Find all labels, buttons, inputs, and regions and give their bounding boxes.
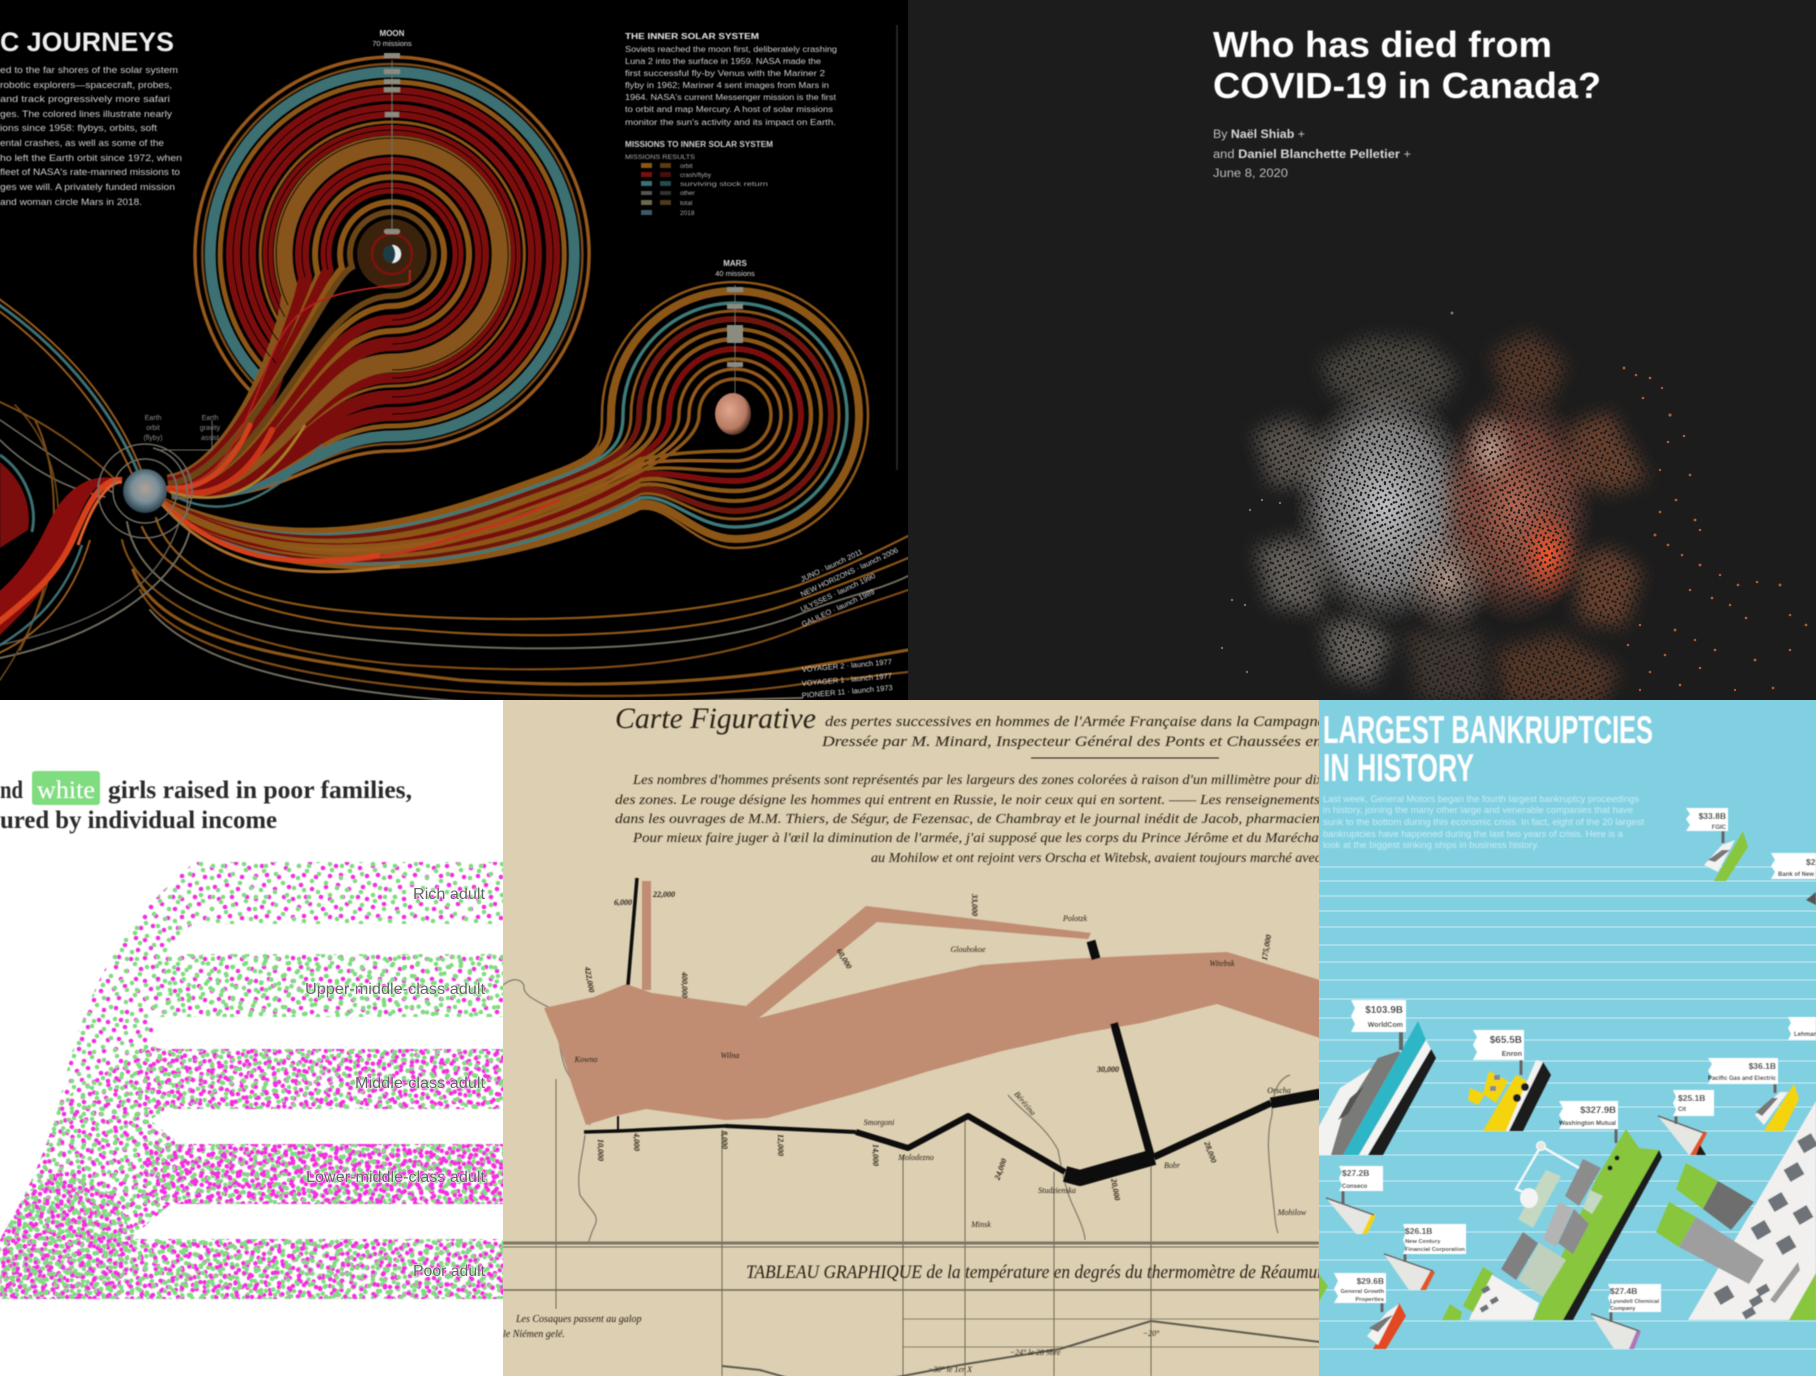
- boat: cit: $25.1B: [1678, 1093, 1705, 1103]
- text block: intro: and woman circle Mars in 2018.: [0, 197, 142, 208]
- city labels: Bérézina: [1012, 1090, 1038, 1117]
- text block: intro: in history, joining the many other large and venerable companies that have: [1323, 805, 1633, 815]
- legend: missions to inner solar system: MISSIONS RESULTS: [625, 154, 696, 161]
- city labels: Kowno: [574, 1055, 597, 1064]
- labels: outer planet missions: [799, 546, 900, 700]
- ship: fgic: [1686, 808, 1748, 881]
- band labels: Lower-middle-class adult: [306, 1169, 486, 1186]
- legend: missions to inner solar system: total: [680, 200, 693, 207]
- ship: fgic: $33.8B: [1699, 811, 1726, 821]
- temperature labels: [928, 1329, 1160, 1374]
- chart: advancing army flow: [544, 881, 1320, 1125]
- city labels: Wilna: [721, 1051, 739, 1060]
- label: mars: 40 missions: [715, 269, 755, 278]
- panel: minard map: [503, 700, 1325, 1376]
- city labels: 400,000: [680, 971, 689, 998]
- ship: enron: [1468, 1030, 1551, 1131]
- text block: explanation: des zones. Le rouge désigne les hommes qui entrent en Russie, le noir ceux qui en sortent. —— Les renseignements: [615, 792, 1320, 807]
- heading: white girls raised in poor families: girls raised in poor families,: [108, 775, 412, 804]
- ship: building ship: [1656, 1101, 1816, 1320]
- legend: missions to inner solar system: surviving stock return: [680, 181, 769, 188]
- text block: explanation: au Mohilow et ont rejoint vers Orscha et Witebsk, avaient toujours marché avec: [871, 850, 1321, 865]
- title: IN HISTORY: [1323, 747, 1474, 790]
- text block: intro: [0, 65, 182, 208]
- note: cossacks: le Niémen gelé.: [503, 1329, 565, 1340]
- label: mars: MARS: [723, 259, 747, 268]
- text block: explanation: Pour mieux faire juger à l'œil la diminution de l'armée, j'ai supposé que les corps du Prince Jérôme et du Maréchal: [632, 830, 1323, 845]
- text block: the inner solar system: 1964. NASA's current Messenger mission is the first: [625, 92, 837, 102]
- panel: cosmic journeys: [0, 24, 908, 700]
- boat: cit: Cit: [1678, 1107, 1686, 1113]
- spiral: outer planets arcs at left: [0, 296, 142, 655]
- city labels: Smorgoni: [864, 1118, 894, 1127]
- text block: intro: Last week, General Motors began the fourth largest bankruptcy proceedings: [1323, 794, 1640, 804]
- ship: pacific gas and electric: Pacific Gas and Electric: [1708, 1076, 1777, 1082]
- city labels: 60,000: [835, 947, 854, 971]
- subtitle: Dressée par M. Minard, Inspecteur Général des Ponts et Chaussées en: [821, 734, 1322, 750]
- city labels: Molodezno: [897, 1153, 934, 1162]
- trunk: upper flow: [60, 862, 195, 1100]
- boat: lyondell chemical: Company: [1610, 1306, 1636, 1312]
- text block: intro: fleet of NASA's rate-manned missions to: [0, 167, 180, 178]
- city labels: Witebsk: [1210, 959, 1235, 968]
- label: earth orbit: (flyby): [143, 435, 163, 442]
- chart: retreating army flow: [584, 878, 1320, 1178]
- text block: intro: robotic explorers—spacecraft, probes,: [0, 80, 172, 91]
- heading: cosmic journeys: C JOURNEYS: [0, 27, 174, 57]
- heading: white girls raised in poor families: ured by individual income: [0, 805, 277, 834]
- city labels: 175,000: [1260, 934, 1273, 961]
- ship: general growth properties: Properties: [1355, 1297, 1384, 1303]
- ship: general growth properties: $29.6B: [1357, 1276, 1384, 1286]
- labels: outer planet missions: VOYAGER 2 · launch 1977: [801, 657, 892, 674]
- city labels: Bobr: [1164, 1161, 1181, 1170]
- label: mars: [715, 259, 755, 278]
- city labels: 10,000: [596, 1139, 605, 1161]
- text block: intro: ental crashes, as well as some of the: [0, 138, 164, 149]
- city labels: Studzienska: [1038, 1186, 1076, 1195]
- ship: enron: Enron: [1502, 1051, 1522, 1058]
- labels: outer planet missions: PIONEER 11 · launch 1973: [801, 683, 893, 700]
- legend: missions to inner solar system: crash/flyby: [680, 172, 712, 179]
- chart: income flow dots: [0, 862, 504, 1299]
- band labels: Upper-middle-class adult: [305, 981, 486, 998]
- subtitle: [821, 714, 1325, 758]
- note: cossacks: [503, 1314, 642, 1340]
- city labels: Mohilow: [1277, 1208, 1307, 1217]
- labels: outer planet missions: JUNO · launch 2011: [799, 547, 864, 584]
- orbit rings around earth: [98, 420, 212, 538]
- label: earth orbit: gravity: [200, 425, 221, 432]
- text block: intro: bankruptcies have happened during the last two years of crisis. Here is a: [1323, 829, 1623, 839]
- rivers: [503, 980, 1290, 1243]
- legend: missions to inner solar system: MISSIONS TO INNER SOLAR SYSTEM: [625, 140, 773, 149]
- band: poor adult: [0, 1239, 504, 1299]
- heading: white girls raised in poor families: white: [37, 775, 95, 804]
- text block: the inner solar system: first successful fly-by Venus with the Mariner 2: [625, 68, 825, 78]
- boat: lyondell chemical: $27.4B: [1610, 1286, 1637, 1296]
- boat: lyondell chemical: Lyondell Chemical: [1610, 1299, 1660, 1305]
- grid lines: [503, 1079, 1319, 1376]
- labels: outer planet missions: ULYSSES · launch 1990: [799, 571, 877, 614]
- text block: intro: look at the biggest sinking ships in business history.: [1323, 840, 1539, 850]
- temperature labels: −24° le 28 9bre: [1010, 1348, 1061, 1357]
- band: lower-middle-class adult: [145, 1144, 504, 1204]
- panel: covid-19 canada: [908, 0, 1816, 700]
- label: moon: MOON: [380, 29, 405, 38]
- city labels: Polotzk: [1062, 914, 1087, 923]
- title: [1213, 24, 1601, 106]
- title: carte figurative: Carte Figurative: [615, 702, 816, 735]
- boat: new century: [1384, 1224, 1466, 1290]
- boat: cit: [1658, 1090, 1714, 1155]
- spiral: mars missions: [160, 282, 868, 572]
- temperature labels: −20°: [1143, 1329, 1160, 1338]
- note: cossacks: Les Cosaques passent au galop: [515, 1314, 642, 1325]
- label: moon: 70 missions: [372, 39, 412, 48]
- flag: lehman: [1788, 1017, 1816, 1040]
- band labels: [305, 886, 486, 1280]
- ship: worldcom: WorldCom: [1368, 1022, 1403, 1029]
- text block: intro: ions since 1958: flybys, orbits, soft: [0, 123, 157, 134]
- band: upper-middle-class adult: [155, 954, 504, 1017]
- panel: income mobility dots: [0, 700, 503, 1376]
- flag: bank of new england: $2: [1806, 857, 1816, 867]
- city labels: 8,000: [720, 1131, 729, 1149]
- ship: general growth properties: [1334, 1273, 1406, 1349]
- labels: outer planet missions: VOYAGER 1 · launch 1977: [801, 671, 892, 688]
- text block: intro: ges we will. A privately funded mission: [0, 182, 175, 193]
- icon: moon: [383, 229, 401, 263]
- chart: virus dot cloud: [1210, 312, 1807, 705]
- label: moon: [372, 29, 412, 48]
- ship: enron: $65.5B: [1490, 1035, 1522, 1046]
- flag: bank of new england: [1771, 853, 1816, 905]
- legend: missions to inner solar system: other: [680, 190, 696, 197]
- text block: intro: sunk to the bottom during this economic crisis. In fact, eight of the 20 largest: [1323, 817, 1645, 827]
- label: earth orbit: [143, 415, 221, 442]
- subtitle: des pertes successives en hommes de l'Armée Française dans la Campagne: [825, 714, 1325, 730]
- text block: the inner solar system: Luna 2 into the surface in 1959. NASA made the: [625, 56, 821, 66]
- boat: conseco: [1326, 1166, 1383, 1234]
- label: earth orbit: Earth: [202, 415, 218, 422]
- icon: earth: [123, 469, 167, 513]
- labels: outer planet missions: GALILEO · launch 1989: [800, 587, 876, 629]
- labels: outer planet missions: NEW HORIZONS · launch 2006: [799, 546, 900, 599]
- temperature labels: −30° le 1er X: [928, 1365, 973, 1374]
- band labels: Rich adult: [413, 886, 486, 903]
- text block: the inner solar system: to orbit and map Mercury. A host of solar missions: [625, 104, 833, 114]
- heading: white girls raised in poor families: nd: [0, 775, 23, 804]
- legend: missions to inner solar system: 2018: [680, 210, 695, 217]
- text block: intro: ho left the Earth orbit since 1972, when: [0, 153, 182, 164]
- text block: explanation: Les nombres d'hommes présents sont représentés par les largeurs des zones colorées à raison d'un millimètre pour dix: [632, 772, 1323, 787]
- band: middle-class adult: [145, 1049, 504, 1109]
- legend: missions to inner solar system: orbit: [680, 163, 693, 170]
- city labels: Orscha: [1267, 1086, 1291, 1095]
- byline: June 8, 2020: [1213, 168, 1288, 180]
- ship: washington mutual: [1442, 1101, 1662, 1320]
- boat: conseco: Conseco: [1342, 1184, 1368, 1190]
- title: COVID-19 in Canada?: [1213, 65, 1601, 106]
- text block: the inner solar system: Soviets reached the moon first, deliberately crashing: [625, 44, 837, 54]
- band: rich adult: [193, 862, 504, 924]
- text block: the inner solar system: THE INNER SOLAR SYSTEM: [625, 31, 759, 41]
- ship: worldcom: [1318, 1000, 1436, 1155]
- city labels: [574, 890, 1307, 1229]
- city labels: Gloubokoe: [950, 945, 986, 954]
- byline: and Daniel Blanchette Pelletier +: [1213, 149, 1411, 161]
- ship: fgic: FGIC: [1712, 825, 1727, 831]
- legend: missions to inner solar system: [625, 140, 773, 217]
- city labels: 6,000: [614, 898, 632, 907]
- title: [1323, 709, 1653, 790]
- chart: long mission lines to outer planets: [0, 402, 908, 705]
- text block: intro: and track progressively more safari: [0, 94, 170, 105]
- title: LARGEST BANKRUPTCIES: [1323, 709, 1653, 752]
- city labels: 12,000: [776, 1134, 785, 1156]
- ship: pacific gas and electric: $36.1B: [1749, 1061, 1776, 1071]
- city labels: Minsk: [970, 1220, 991, 1229]
- city labels: 22,000: [652, 890, 675, 899]
- text block: intro: [1323, 794, 1645, 850]
- trunk: dense lower flow: [0, 1170, 135, 1299]
- ship: worldcom: $103.9B: [1365, 1005, 1403, 1016]
- water lines: [1319, 867, 1816, 1349]
- ship: general growth properties: General Growth: [1340, 1289, 1384, 1295]
- text block: the inner solar system: flyby in 1962; Mariner 4 sent images from Mars in: [625, 80, 829, 90]
- text block: explanation: dans les ouvrages de M.M. Thiers, de Ségur, de Fezensac, de Chambray et le journal inédit de Jacob, pharmacien: [615, 811, 1320, 826]
- city labels: 33,000: [970, 893, 979, 916]
- trunk: middle flow: [0, 1045, 175, 1239]
- chart: temperature line: [722, 1321, 1320, 1376]
- text block: intro: ges. The colored lines illustrate nearly: [0, 109, 172, 120]
- heading: white girls raised in poor families: [0, 771, 412, 834]
- city labels: 4,000: [632, 1132, 641, 1151]
- boat: new century: $26.1B: [1405, 1226, 1432, 1236]
- icon: mars planet: [715, 393, 751, 435]
- city labels: 30,000: [1096, 1065, 1119, 1074]
- city labels: 28,000: [1202, 1139, 1218, 1164]
- byline: By Naël Shiab +: [1213, 129, 1305, 141]
- byline: [1213, 129, 1411, 180]
- spiral: moon missions: [168, 53, 589, 507]
- boat: conseco: $27.2B: [1342, 1168, 1369, 1178]
- right rule: [896, 25, 898, 470]
- boat: new century: Financial Corporation: [1405, 1247, 1465, 1253]
- scattered dots: [1622, 366, 1807, 691]
- text block: the inner solar system: monitor the sun's activity and its impact on Earth.: [625, 117, 836, 127]
- boat: new century: New Century: [1405, 1239, 1441, 1245]
- label: earth orbit: assist: [201, 435, 219, 442]
- boat: lyondell chemical: [1591, 1284, 1661, 1349]
- panel: largest bankruptcies: [1319, 700, 1816, 1376]
- label: earth orbit: Earth: [145, 415, 161, 422]
- city labels: 422,000: [583, 965, 596, 993]
- text block: the inner solar system: [625, 31, 837, 127]
- ship: washington mutual: $327.9B: [1580, 1105, 1616, 1116]
- city labels: 14,000: [871, 1144, 880, 1166]
- ship: pacific gas and electric: [1708, 1058, 1799, 1131]
- band labels: Middle-class adult: [355, 1075, 486, 1092]
- text block: intro: ed to the far shores of the solar system: [0, 65, 178, 76]
- text block: explanation: [615, 772, 1323, 865]
- label: earth orbit: orbit: [146, 425, 160, 432]
- ship: washington mutual: Washington Mutual: [1559, 1120, 1616, 1127]
- ship fragment: green bow: [1318, 1273, 1328, 1303]
- city labels: 24,000: [992, 1157, 1009, 1182]
- band labels: Poor adult: [413, 1263, 486, 1280]
- city labels: 20,000: [1109, 1177, 1122, 1201]
- title: Who has died from: [1213, 24, 1552, 65]
